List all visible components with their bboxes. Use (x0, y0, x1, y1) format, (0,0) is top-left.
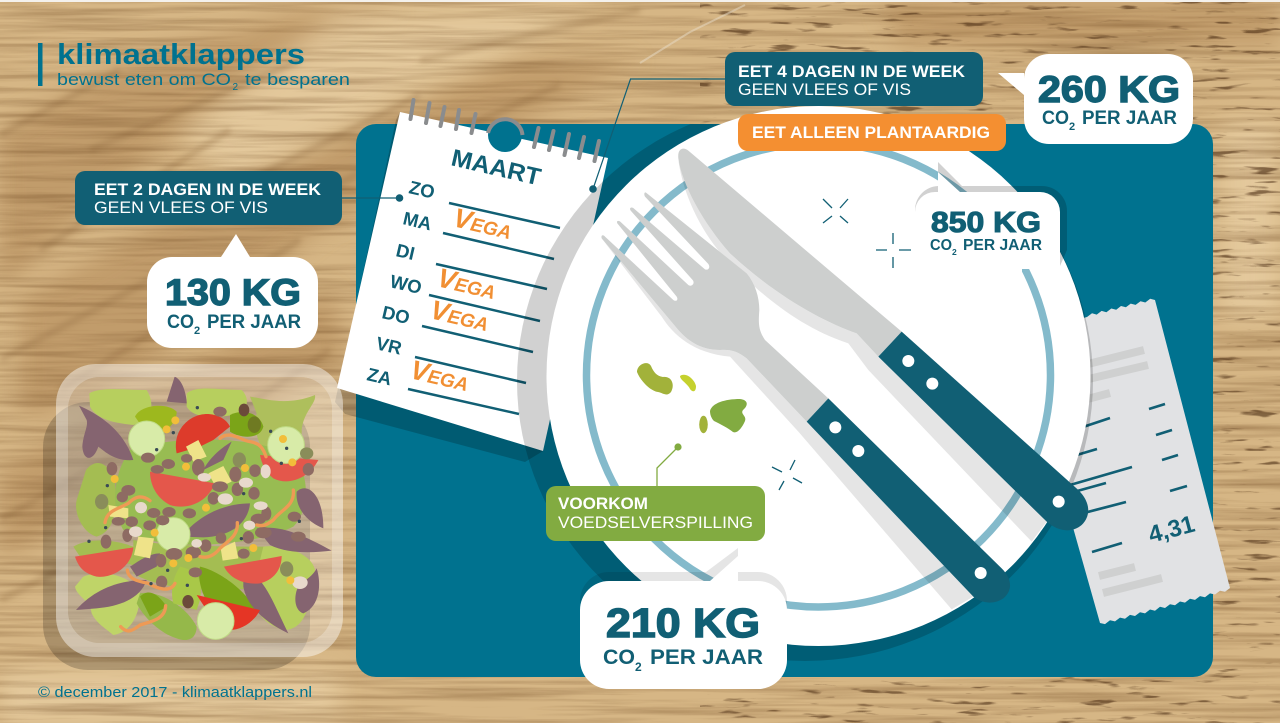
receipt (1020, 299, 1230, 624)
food leftovers (637, 363, 747, 433)
handwritten vega marks: VEGA (435, 263, 499, 305)
bubble: 210 kg: 2 (635, 660, 642, 674)
handwritten vega marks (408, 203, 515, 397)
footer credit: © december 2017 - klimaatklappers.nl (38, 684, 312, 701)
calendar hole (488, 118, 522, 152)
bubble: 260 kg: 2 (1069, 121, 1075, 133)
avocado chunks (108, 440, 238, 561)
handwritten vega marks: VEGA (428, 295, 492, 337)
sparkle: top (823, 199, 848, 223)
title block: 2 (232, 82, 238, 93)
white beans (129, 464, 308, 589)
calendar day labels: DO (380, 301, 412, 328)
callout: voorkom voedselverspilling (546, 486, 765, 541)
beans (101, 407, 314, 588)
bubble: 130 kg: PER JAAR (207, 312, 301, 333)
seed dots (87, 406, 301, 587)
receipt grey bars (1080, 350, 1162, 593)
lettuce (73, 389, 315, 640)
title block: te besparen (245, 70, 350, 89)
fork handle (807, 398, 1010, 603)
callout: voorkom voedselverspilling: VOORKOM (558, 495, 648, 513)
bubble shadow: 210 kg (580, 548, 787, 640)
salad box with salad (56, 364, 343, 657)
tomatoes (75, 414, 318, 630)
salad contents (73, 377, 332, 640)
callout: voorkom connector (657, 443, 682, 486)
sparkle: cross (876, 233, 911, 268)
calendar day labels: ZA (365, 363, 394, 389)
bubble: 850 kg: 2 (952, 247, 957, 257)
plate shadow (517, 101, 1093, 661)
calendar rules (408, 203, 560, 414)
bubble: 260 kg: 260 KG (1038, 69, 1180, 110)
callout: eet 2 dagen: GEEN VLEES OF VIS (94, 199, 268, 217)
title block: klimaatklappers (57, 39, 305, 71)
bubble: 130 kg (147, 234, 318, 348)
calendar day labels: ZO (407, 176, 437, 203)
bubble: 130 kg: CO (167, 312, 194, 333)
bubble: 130 kg: 130 KG (165, 272, 301, 313)
callout: eet 4 dagen (725, 52, 983, 106)
basil leaves (76, 377, 332, 633)
salad box inner film (68, 377, 332, 643)
olive beans (95, 416, 313, 577)
callout: eet alleen plantaardig (738, 114, 1006, 151)
calendar heading: MAART (449, 145, 544, 191)
callout: eet 4 dagen: EET 4 DAGEN IN DE WEEK (738, 63, 965, 81)
salad box shadow (43, 402, 310, 670)
calendar shadow (335, 112, 543, 462)
calendar (337, 100, 608, 451)
bubble: 210 kg (580, 556, 787, 689)
bubble: 850 kg (915, 172, 1060, 275)
calendar day labels (365, 176, 437, 389)
knife handle (878, 332, 1088, 530)
salad box rim (56, 364, 343, 657)
bubble: 850 kg: 850 KG (931, 207, 1041, 239)
handwritten vega marks: VEGA (451, 203, 515, 245)
cutlery shadows (602, 160, 1047, 609)
bubble: 210 kg: CO (603, 646, 635, 669)
bubble shadow: 850 kg (915, 162, 1067, 266)
receipt price: 4,31 (1146, 511, 1198, 549)
plate (546, 106, 1090, 646)
calendar day labels: MA (401, 207, 434, 234)
callout: eet 2 dagen connector (342, 194, 403, 202)
bubble: 260 kg (998, 54, 1193, 144)
corn (111, 416, 296, 584)
title block: bewust eten om CO (57, 70, 231, 89)
panel: teal placemat (356, 124, 1213, 677)
callout: eet alleen plantaardig: EET ALLEEN PLANTAARDIG (752, 124, 990, 142)
callout: eet 2 dagen (75, 171, 342, 225)
callout: voorkom voedselverspilling: VOEDSELVERSPILLING (558, 514, 753, 532)
sparkle: lower (772, 460, 802, 490)
calendar day labels: VR (374, 332, 404, 359)
fork (601, 192, 1010, 603)
bubble: 260 kg: PER JAAR (1082, 108, 1177, 129)
bubble: 210 kg: PER JAAR (650, 646, 763, 669)
handwritten vega marks: VEGA (408, 355, 472, 397)
callout: eet 4 dagen: GEEN VLEES OF VIS (738, 81, 911, 99)
callout: eet 4 dagen connector (589, 79, 725, 193)
bubble: 130 kg: 2 (194, 325, 200, 337)
dark beans (182, 404, 249, 608)
receipt lines (1070, 404, 1187, 552)
carrot strips (105, 435, 293, 631)
calendar spiral binding (410, 100, 599, 161)
callout: eet 2 dagen: EET 2 DAGEN IN DE WEEK (94, 181, 321, 199)
calendar day labels: DI (394, 239, 417, 264)
plate rim ring (586, 143, 1050, 607)
bubble: 260 kg: CO (1042, 108, 1069, 129)
bubble: 850 kg: CO (930, 237, 952, 254)
bubble: 850 kg: PER JAAR (963, 237, 1042, 254)
bubble: 210 kg: 210 KG (606, 600, 760, 646)
cucumber slices (129, 421, 304, 639)
knife (678, 149, 1088, 530)
calendar day labels: WO (388, 270, 424, 298)
title block (38, 39, 350, 93)
